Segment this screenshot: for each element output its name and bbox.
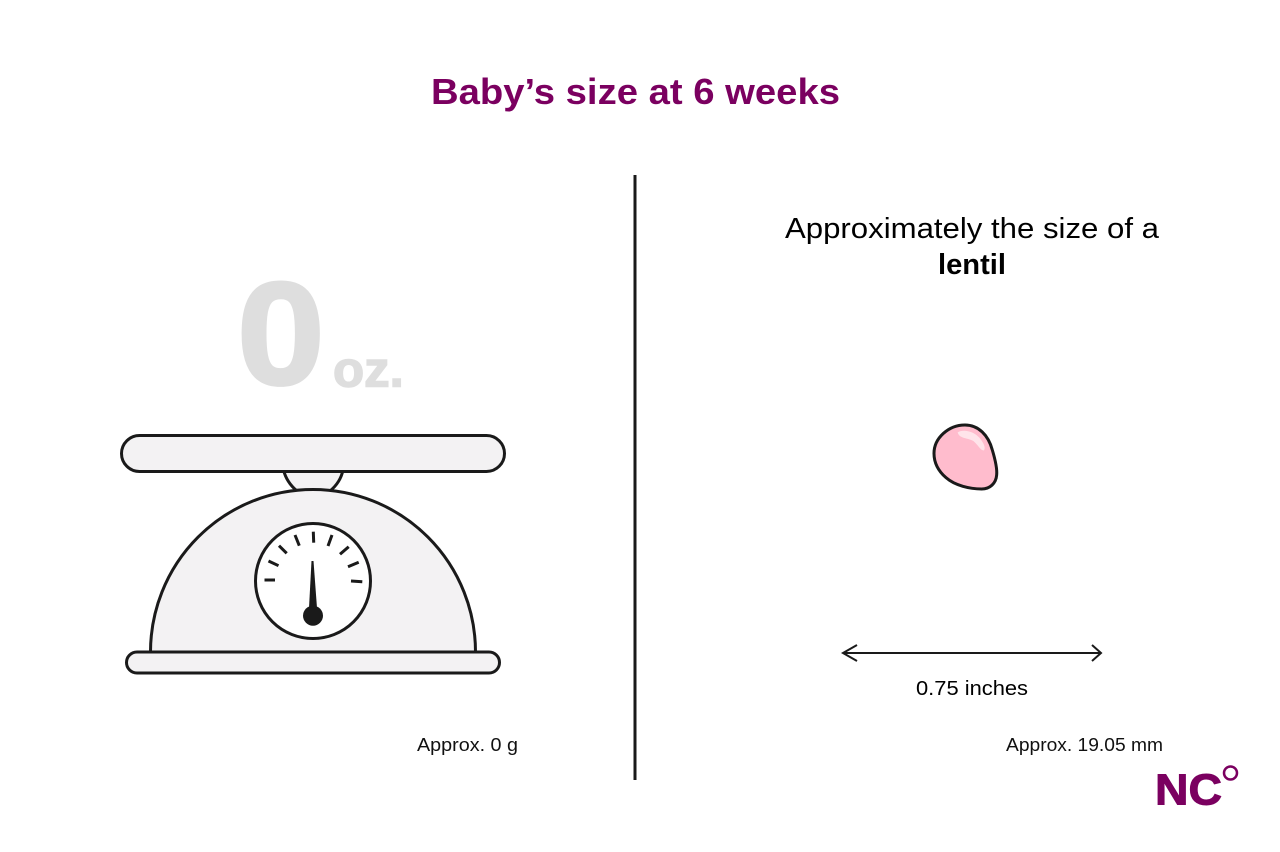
scale top plate	[122, 436, 504, 472]
weight caption: Approx. 0 g	[417, 735, 518, 755]
arrow length label: 0.75 inches	[916, 678, 1028, 700]
scale dial	[256, 524, 370, 638]
scale base	[126, 652, 500, 673]
icon: kitchen scale	[122, 436, 504, 673]
length caption: Approx. 19.05 mm	[1006, 735, 1163, 755]
center divider	[634, 175, 636, 780]
scale dome	[150, 490, 476, 652]
weight value: 0 oz.: oz.	[333, 341, 404, 397]
weight value: 0 oz.	[237, 252, 404, 416]
scale knob	[284, 470, 343, 491]
title: Baby’s size at 6 weeks	[431, 71, 840, 112]
comparison heading: Approximately the size of a	[785, 213, 1160, 245]
comparison heading	[785, 213, 1160, 281]
weight value: 0 oz.: 0	[237, 252, 325, 416]
icon: lentil	[934, 425, 997, 489]
comparison heading: lentil	[938, 249, 1006, 281]
size arrow	[843, 645, 1101, 661]
logo: NC: NC	[1155, 766, 1222, 814]
